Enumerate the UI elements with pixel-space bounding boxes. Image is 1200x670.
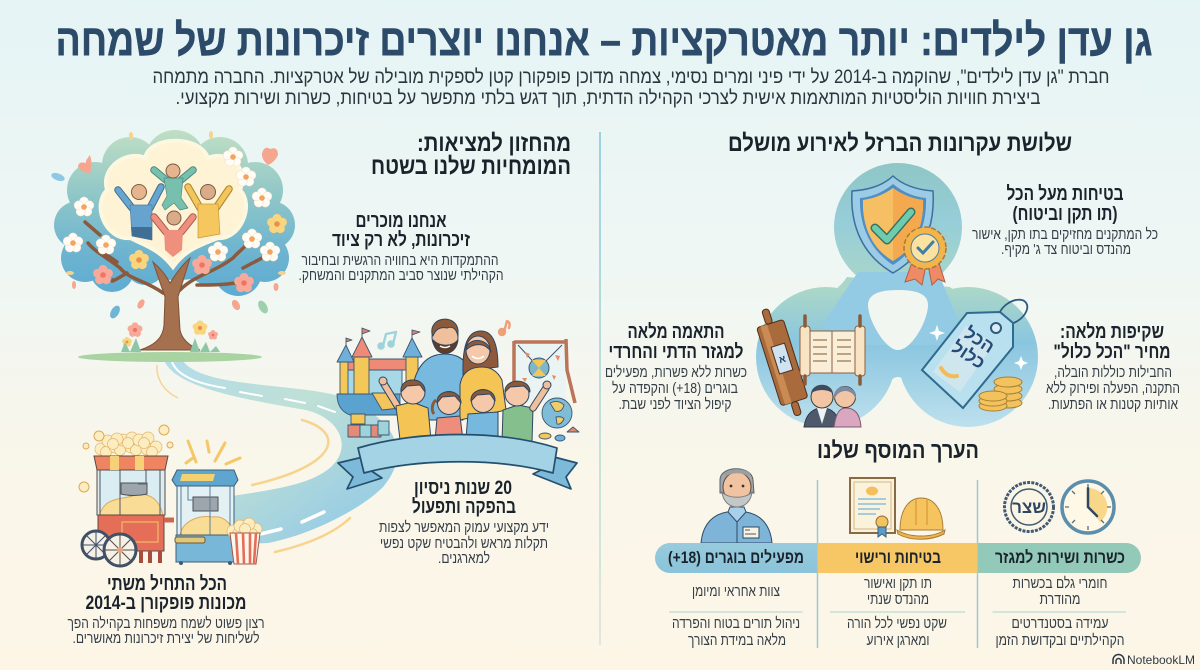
game frame [514,339,575,403]
icon: tree trunk [85,222,262,350]
column text: safety: תו תקן ואישור [864,575,932,592]
text block: selling memories: זיכרונות, לא רק ציוד [332,229,470,251]
icon: couple [804,385,861,427]
column text: safety [847,575,947,649]
text block: safety above all [972,183,1158,258]
text block: full transparency [1046,321,1180,413]
column text: kosher: עמידה בסטנדרטים [1012,615,1108,632]
column text: kosher: מהודרת [1040,591,1080,608]
column text: kosher: חומרי גלם בכשרות [1012,575,1108,592]
heading: vision to reality [371,130,571,180]
text block: 20 years of experience: בהפקה ותפעול [412,496,516,518]
figures in the tree [118,164,229,257]
intro paragraph: חברת "גן עדן לילדים", שהוקמה ב-2014 על ידי פיני ומרים נסימי, צמחה מדוכן פופקורן קטן לספקית מובילה של אטרקציות. החברה מתמחה [152,67,1110,88]
text block: religious sector fit: כשרות ללא פשרות, מפעילים [605,364,747,381]
flowers on the tree [63,147,287,292]
illustration: family and attractions [337,319,579,489]
text block: selling memories [298,210,504,284]
red popcorn cart [79,425,174,566]
text block: 20 years of experience: ידע מקצועי עמוק המאפשר לצפות [379,519,549,536]
pill label: safety: בטיחות ורישוי [855,548,941,567]
heading: vision to reality: מהחזון למציאות: [417,130,571,157]
icon: senior operator [701,469,772,543]
column text: safety: ומארגן אירוע [866,632,930,649]
text block: 20 years of experience: 20 שנות ניסיון [414,477,512,499]
text block: 20 years of experience: למארגנים. [438,550,490,567]
text block: safety above all: מהנדס וביטוח צד ג' מקיף. [1001,241,1131,258]
icon: clock [1062,481,1114,533]
text block: religious sector fit: בוגרים (18+) והקפדה על [612,380,738,397]
NotebookLM mark: NotebookLM [1127,653,1195,667]
text block: full transparency: שקיפות מלאה: [1060,321,1164,343]
illustration: popcorn machines [79,425,262,566]
heading: added value: הערך המוסף שלנו [817,437,979,463]
text block: full transparency: מחיר "הכל כלול" [1054,341,1170,363]
text block: safety above all: (תו תקן וביטוח) [1012,203,1118,225]
trefoil background [756,163,1038,427]
icon: safety shield [852,176,933,273]
intro paragraph [152,67,1110,109]
text block: selling memories: הקהילתי שנוצר סביב המתקנים והמשחק. [298,267,504,284]
icon: certificate [850,478,895,537]
pill label: operators: מפעילים בוגרים (18+) [668,548,804,567]
text block: 20 years of experience [379,477,549,567]
intro paragraph: ביצירת חוויות הוליסטיות המותאמות אישית לצרכי הקהילה הדתית, תוך דגש בלתי מתפשר על בטיחות, כשרות ושירות מקצועי. [176,88,1040,109]
value pill bar [655,543,1141,573]
illustration: trefoil of pillars [752,163,1038,427]
text block: safety above all: בטיחות מעל הכל [1006,183,1124,205]
icon: torah scroll [752,305,812,419]
text block: selling memories: אנחנו מוכרים [356,210,446,232]
falling petals [50,131,286,352]
blue popcorn machine [172,470,238,565]
text block: popcorn origins: מכונות פופקורן ב-2014 [85,592,246,614]
icon: all-inclusive price tag: כלול [948,337,989,373]
text block: religious sector fit: התאמה מלאה [628,321,724,343]
text block: religious sector fit [605,321,747,413]
column text: safety: שקט נפשי לכל הורה [847,615,947,632]
spark lines [186,441,240,464]
music notes [378,321,510,349]
center divider [599,132,601,645]
text block: popcorn origins: הכל התחיל משתי [107,573,227,595]
text block: full transparency: החבילות כוללות הובלה, [1054,364,1172,381]
globe and blocks [348,398,579,441]
column text: kosher: הקהילתיים ובקדושת הזמן [996,632,1124,649]
text block: popcorn origins: רצון פשוט לשמח משפחות בקהילה הפך [68,615,264,632]
text block: popcorn origins: לשליחות של יצירת זיכרונות מאושרים. [72,630,260,647]
column text: operators [672,583,800,649]
road illustration [157,355,397,552]
heading: vision to reality: המומחיות שלנו בשטח [371,153,571,180]
icon: kosher seal: שצר [1012,498,1046,517]
column text: operators: ניהול תורים בטוח והפרדה [672,615,800,632]
text block: selling memories: ההתמקדות היא בחוויה הרגשית ובחיבור [302,252,498,269]
children [379,377,551,442]
column text: kosher [996,575,1124,649]
icon: kosher seal [1004,482,1054,532]
column text: operators: צוות אחראי ומיומן [692,583,780,600]
illustration: family tree of joy [50,130,295,362]
icon: rosette [904,227,946,285]
text block: popcorn origins [68,573,264,647]
text block: safety above all: כל המתקנים מחזיקים בתו תקן, אישור [972,226,1158,243]
text block: religious sector fit: למגזר הדתי והחרדי [608,341,744,363]
column text: safety: מהנדס שנתי [867,591,929,608]
icon: gold coins [979,377,1022,411]
icon: open scroll [800,316,865,384]
popcorn bucket [227,518,262,564]
column text: operators: מלאה במידת הצורך [688,632,786,649]
text block: 20 years of experience: תקלות מראש ולהבטיח שקט נפשי [380,535,548,552]
pill label: kosher: כשרות ושירות למגזר [995,548,1125,567]
banner ribbon [338,434,577,489]
bouncy castle [337,328,422,415]
parents [413,319,506,420]
icon: all-inclusive price tag [922,295,1032,408]
icon: tree crown [54,130,295,296]
text block: religious sector fit: קיפול הציוד לפני שבת. [618,396,732,413]
heading: three pillars: שלושת עקרונות הברזל לאירוע מושלם [728,130,1072,157]
icon: all-inclusive price tag: הכל [960,323,998,357]
icon: hard hat [897,498,945,539]
icon: torah scroll: א [778,354,788,366]
